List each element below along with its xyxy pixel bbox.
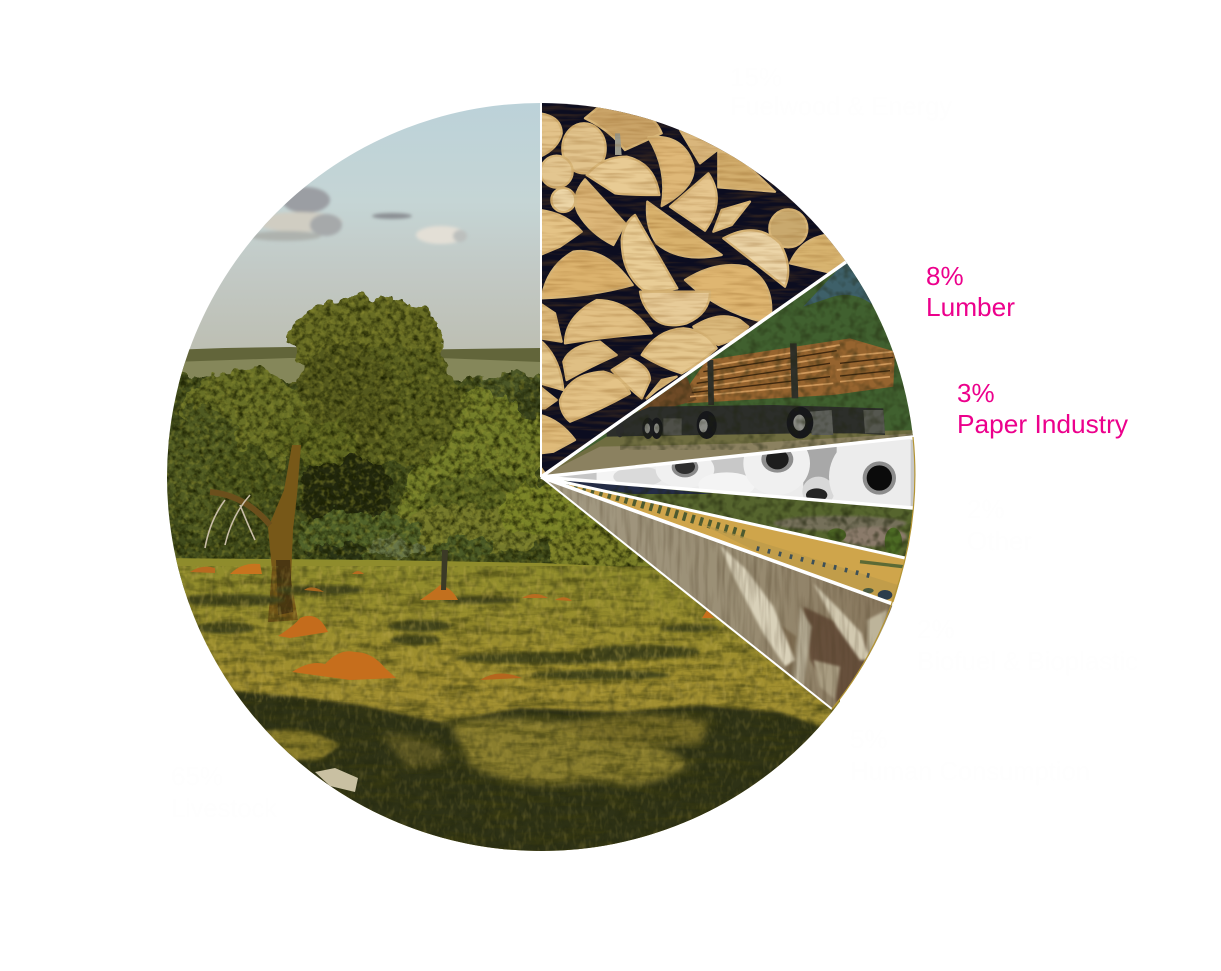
slice: livestock landscape photo bbox=[150, 100, 840, 862]
label: livestock (near-white) bbox=[171, 761, 278, 823]
label: biofuel and bioplastic (near-white) bbox=[917, 614, 1138, 676]
label: livestock (near-white): 65% bbox=[171, 761, 223, 791]
grass bbox=[556, 430, 913, 469]
label: lumber: Lumber bbox=[926, 292, 1015, 322]
label: other (near-white): 2% bbox=[967, 494, 1005, 524]
label: human consumption (near-white): 5% bbox=[850, 724, 888, 754]
slice: fuelwood stacked logs photo bbox=[535, 100, 855, 480]
label: human consumption (near-white) bbox=[850, 724, 1090, 786]
label: lumber bbox=[926, 261, 1015, 322]
logs bbox=[540, 107, 845, 480]
stem streaks bbox=[560, 480, 905, 715]
tree canopy bbox=[169, 296, 465, 536]
fence post bbox=[441, 550, 448, 590]
label: fuelwood and energy (near-white) bbox=[730, 62, 952, 121]
slice: other crops field photo bbox=[566, 480, 913, 556]
label: fuelwood and energy (near-white): Fuelwood & Energy bbox=[730, 91, 952, 121]
sky bbox=[160, 100, 550, 355]
label: biofuel and bioplastic (near-white): 2% bbox=[917, 614, 955, 644]
label: paper industry bbox=[957, 378, 1128, 439]
slice: biofuel crop rows photo bbox=[566, 484, 904, 604]
label: livestock (near-white): Livestock bbox=[171, 793, 278, 823]
termite mounds bbox=[190, 564, 714, 680]
dark stems bbox=[803, 607, 873, 707]
gold rim bbox=[832, 437, 915, 709]
slice: lumber truck photo bbox=[540, 257, 920, 480]
grass shadows bbox=[175, 585, 720, 680]
slice: wheat photo bbox=[548, 482, 893, 708]
label: paper industry: Paper Industry bbox=[957, 409, 1128, 439]
lower trunk bbox=[268, 572, 298, 622]
label: fuelwood and energy (near-white): 15% bbox=[730, 62, 782, 92]
infographic: photo pie chart bbox=[167, 103, 1128, 851]
wood grain bbox=[542, 104, 840, 468]
distant hills bbox=[170, 347, 541, 385]
label: other (near-white): Other bbox=[967, 526, 1032, 556]
log stack bbox=[683, 338, 895, 403]
label: other (near-white) bbox=[967, 494, 1032, 556]
ground bbox=[160, 558, 840, 858]
clouds bbox=[249, 187, 467, 244]
shadow in foreground bbox=[225, 690, 830, 860]
label: paper industry: 3% bbox=[957, 378, 995, 408]
stakes bbox=[707, 343, 798, 405]
slice dividers bbox=[541, 103, 913, 709]
midground bushes and hill bbox=[167, 369, 654, 593]
wheat ears bbox=[720, 545, 887, 700]
sheep bbox=[315, 768, 358, 792]
foliage texture bbox=[620, 260, 920, 450]
sky and mountain bbox=[804, 262, 872, 306]
label: lumber: 8% bbox=[926, 261, 964, 291]
label: biofuel and bioplastic (near-white): Biofuel & Bioplastic bbox=[917, 646, 1138, 676]
trunk and branches bbox=[205, 445, 301, 622]
wheels bbox=[787, 407, 813, 439]
grass texture bbox=[160, 566, 840, 862]
label: human consumption (near-white): Human Consumption bbox=[850, 756, 1090, 786]
pie chart bbox=[150, 100, 926, 862]
forest bbox=[571, 262, 913, 458]
trailer bbox=[607, 405, 885, 437]
slice: paper rolls photo bbox=[558, 439, 914, 506]
